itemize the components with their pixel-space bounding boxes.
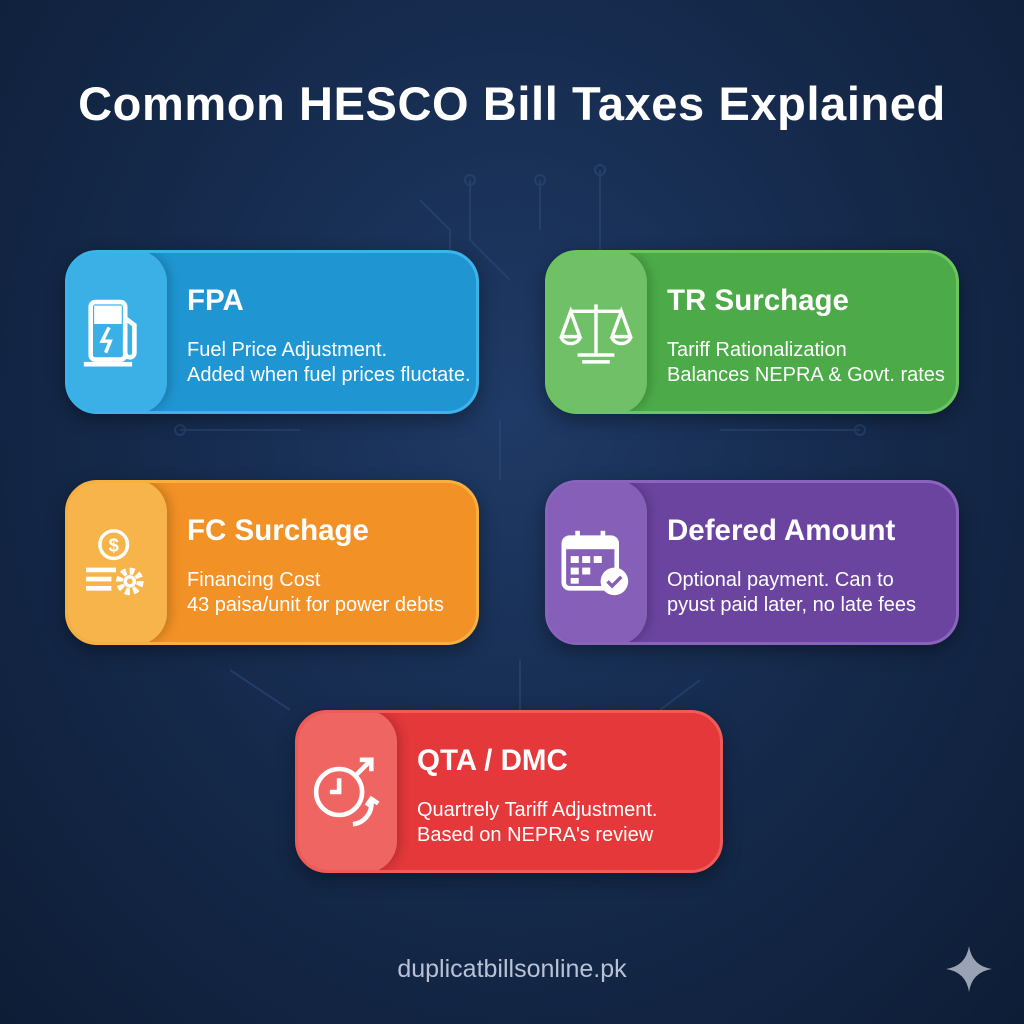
panel: QTA / DMC: Quartrely Tariff Adjustment. xyxy=(417,799,657,821)
panel: QTA / DMC: Based on NEPRA's review xyxy=(417,824,653,846)
panel: TR Surchage: TR Surchage xyxy=(667,284,849,317)
icon: sparkle xyxy=(946,946,992,992)
panel: FPA: FPA xyxy=(187,284,244,317)
panel: TR Surchage: Balances NEPRA & Govt. rates xyxy=(667,364,945,386)
title: Common HESCO Bill Taxes Explained xyxy=(78,77,946,130)
icon: clock arrows xyxy=(295,710,397,873)
icon: fuel pump xyxy=(65,250,167,414)
panel: FC Surchage: 43 paisa/unit for power debts xyxy=(187,594,444,616)
panel: TR Surchage xyxy=(545,250,959,414)
panel: Defered Amount: Defered Amount xyxy=(667,514,895,547)
panel: FC Surchage: Financing Cost xyxy=(187,569,320,591)
panel: TR Surchage: Tariff Rationalization xyxy=(667,339,847,361)
panel: QTA / DMC: QTA / DMC xyxy=(417,744,568,777)
icon: coins and gear xyxy=(65,480,167,645)
panel: FC Surchage: FC Surchage xyxy=(187,514,369,547)
panel: QTA / DMC xyxy=(295,710,723,873)
panel: Defered Amount: pyust paid later, no late fees xyxy=(667,594,916,616)
panel: FPA xyxy=(65,250,479,414)
panel: Defered Amount xyxy=(545,480,959,645)
panel: FPA: Fuel Price Adjustment. xyxy=(187,339,387,361)
icon: coins and gear: $ xyxy=(109,534,119,555)
panel: FPA: Added when fuel prices fluctate. xyxy=(187,364,471,386)
icon: calendar check xyxy=(545,480,647,645)
icon: scales xyxy=(545,250,647,414)
panel: Defered Amount: Optional payment. Can to xyxy=(667,569,894,591)
footer: duplicatbillsonline.pk xyxy=(397,955,627,983)
panel: FC Surchage xyxy=(65,480,479,645)
